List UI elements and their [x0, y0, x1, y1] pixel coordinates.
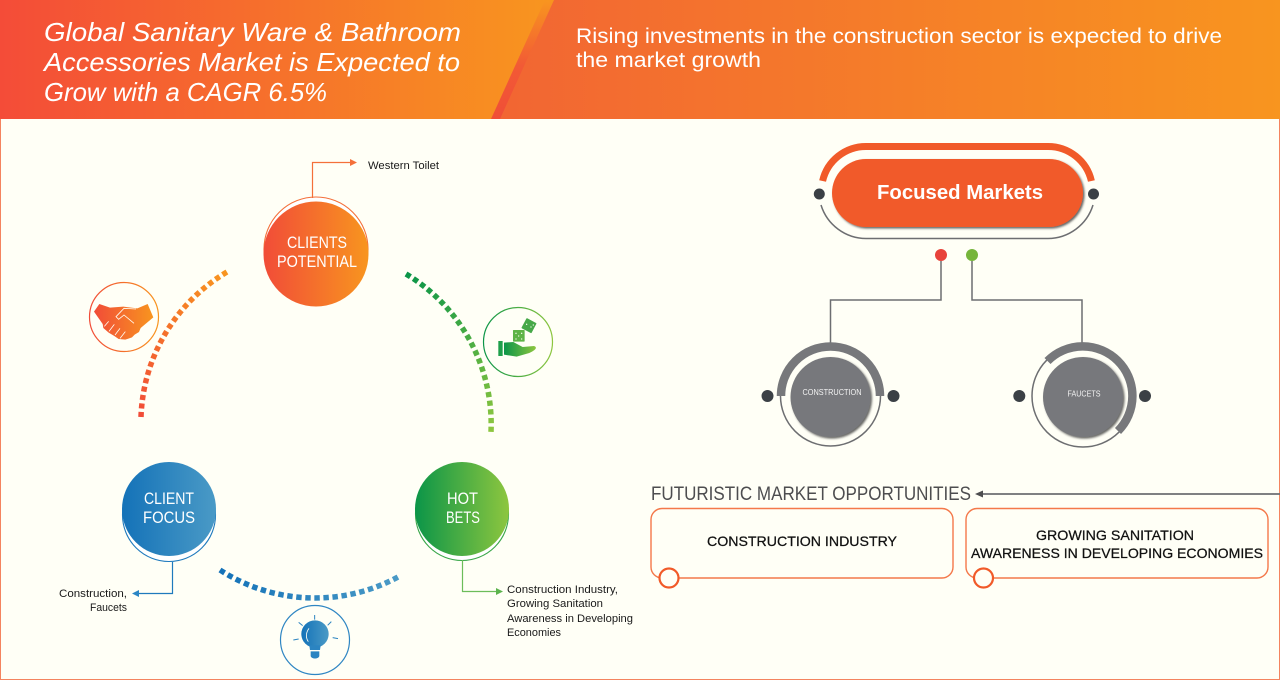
connector: focused markets to construction [830, 249, 947, 343]
circle: clients potential: POTENTIAL [277, 253, 357, 271]
circle: clients potential: CLIENTS [287, 234, 347, 252]
header title: Global Sanitary Ware & Bathroom [44, 17, 461, 47]
label: construction, faucets: Construction, [59, 588, 127, 600]
circle: hot bets [415, 462, 509, 560]
header subtitle: the market growth [576, 49, 761, 72]
card: growing sanitation awareness: GROWING SANITATION [1036, 527, 1194, 543]
circle: hot bets: BETS [446, 509, 480, 527]
card: construction industry: CONSTRUCTION INDUSTRY [707, 533, 898, 549]
connector: focused markets to faucets [966, 249, 1082, 343]
label: hot bets items: Economies [507, 627, 561, 639]
header title: Grow with a CAGR 6.5% [44, 77, 327, 107]
icon: handshake [90, 282, 158, 352]
node: faucets: FAUCETS [1068, 390, 1100, 398]
label: hot bets items: Construction Industry, [507, 584, 618, 596]
card: growing sanitation awareness [966, 508, 1268, 588]
connector: hot bets to label [462, 560, 503, 595]
node: faucets [1013, 345, 1151, 447]
header title: Accessories Market is Expected to [42, 47, 460, 77]
dotted arc: green [406, 274, 491, 432]
card: growing sanitation awareness: AWARENESS IN DEVELOPING ECONOMIES [971, 545, 1263, 561]
label: hot bets items: Awareness in Developing [507, 613, 633, 625]
circle: client focus [122, 462, 216, 562]
header subtitle: Rising investments in the construction sector is expected to drive [576, 25, 1222, 48]
node: construction: CONSTRUCTION [802, 388, 862, 397]
focused markets badge [814, 146, 1099, 238]
icon: light bulb [280, 606, 350, 674]
header band [0, 0, 1280, 119]
circle: hot bets: HOT [447, 490, 478, 508]
icon: hand with dice [484, 308, 552, 376]
card: construction industry [651, 508, 953, 588]
dotted arc: orange [141, 272, 227, 417]
arrow: into futuristic heading [975, 490, 1280, 498]
dotted arc: blue [220, 570, 398, 598]
label: western toilet: Western Toilet [368, 160, 439, 172]
label: construction, faucets [59, 588, 127, 614]
badge title: Focused Markets [877, 182, 1043, 204]
label: hot bets items: Growing Sanitation [507, 598, 603, 610]
header subtitle [576, 25, 1222, 72]
label: construction, faucets: Faucets [90, 602, 127, 614]
circle: client focus: CLIENT [144, 490, 194, 508]
connector: clients potential to western toilet [312, 159, 357, 198]
connector: client focus to label [132, 562, 172, 597]
heading: futuristic market opportunities: FUTURISTIC MARKET OPPORTUNITIES [651, 483, 971, 505]
circle: clients potential [264, 197, 368, 306]
label: hot bets items [507, 584, 633, 639]
node: construction [762, 346, 900, 446]
header title [42, 17, 461, 107]
circle: client focus: FOCUS [143, 509, 195, 527]
